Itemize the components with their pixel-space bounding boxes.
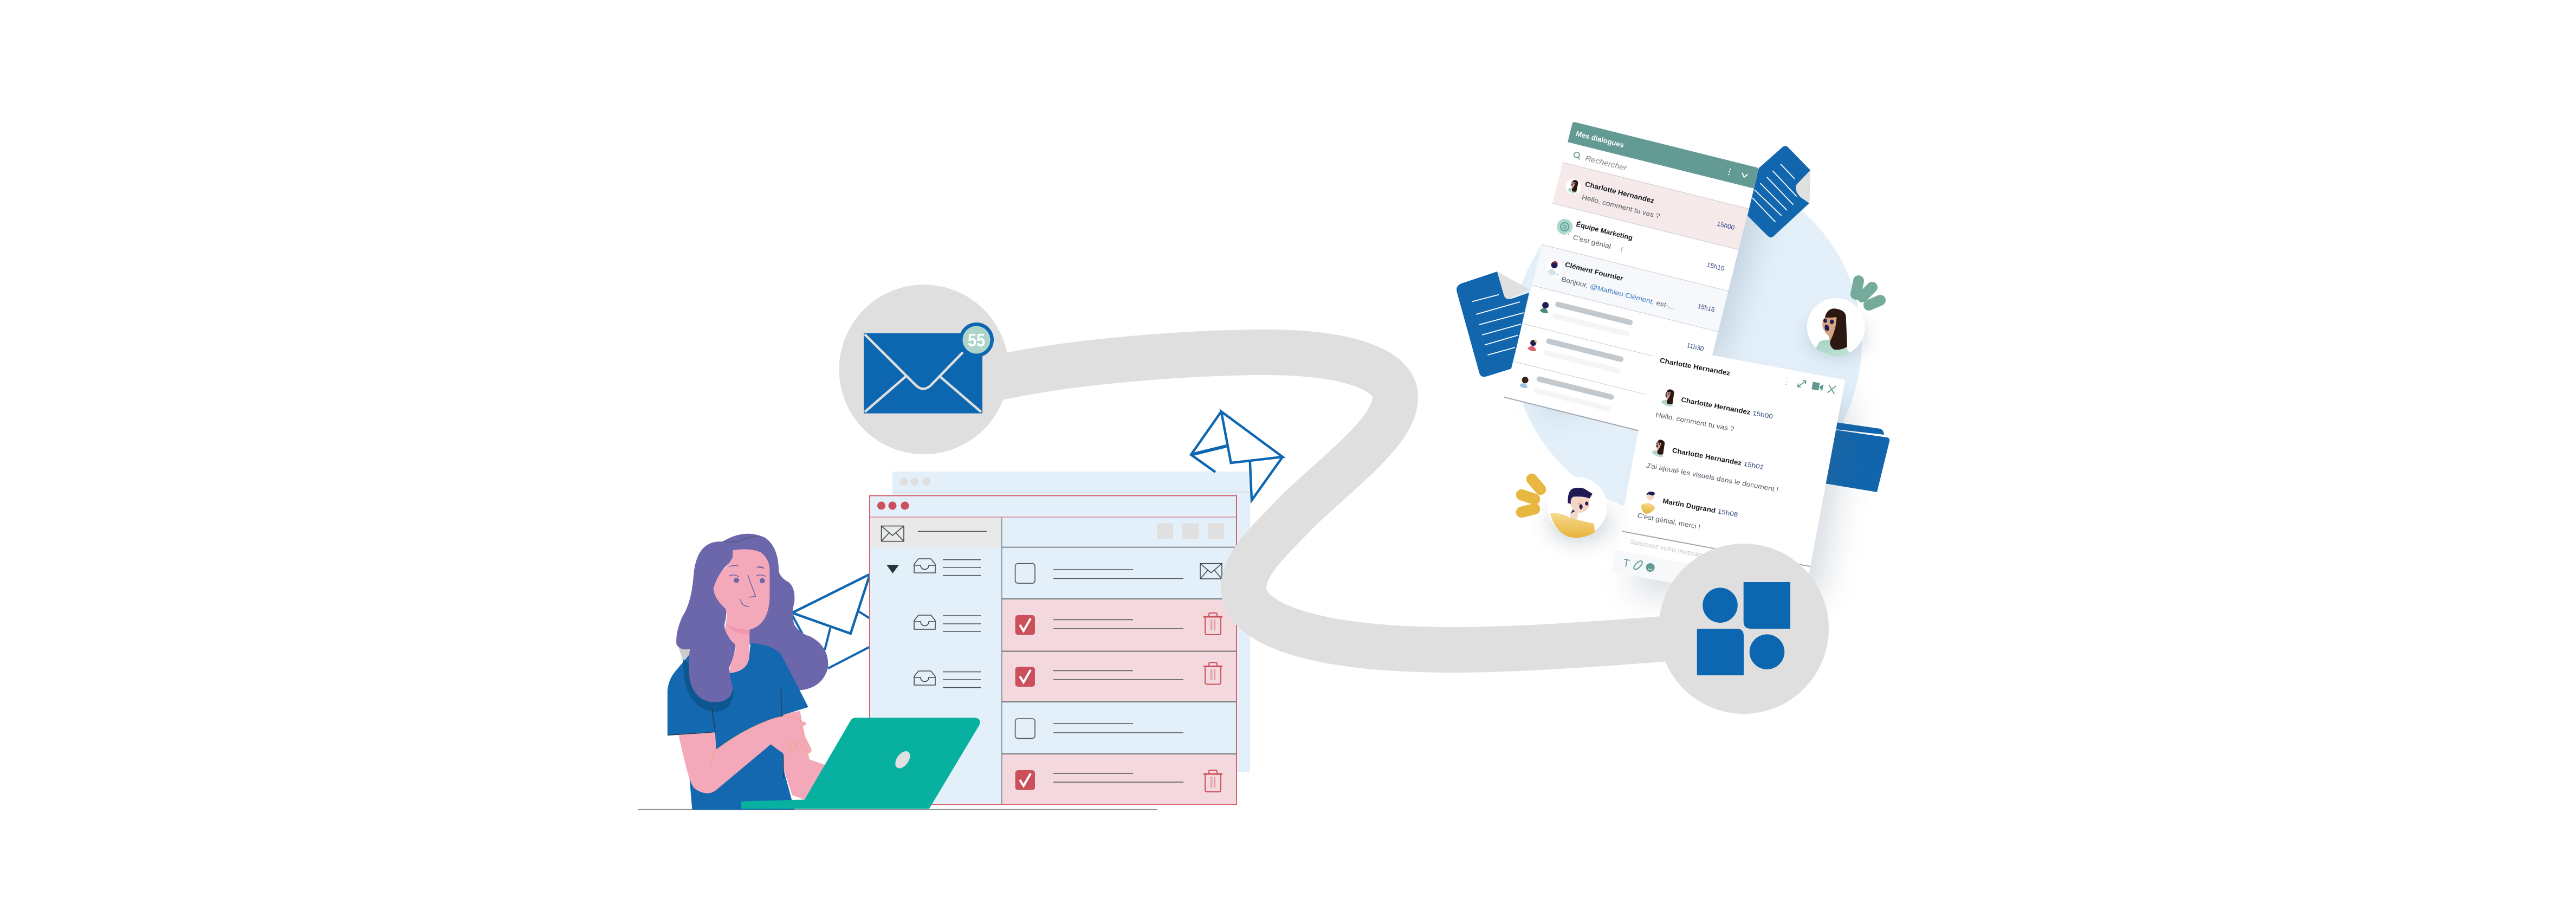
window title dots [877, 502, 909, 509]
mail badge circle [839, 285, 1009, 454]
row: Clément Fournier [1532, 244, 1728, 332]
laptop [741, 718, 980, 809]
composer toolbar: T [1622, 557, 1630, 570]
composer divider [1622, 531, 1810, 566]
woman facial features [728, 565, 766, 606]
icon: document left [1457, 272, 1530, 377]
icon: flying envelope top [1191, 411, 1283, 500]
avatar: woman with green leaves [1807, 281, 1880, 357]
sidebar folder 1 [914, 559, 981, 576]
conversation window [1612, 344, 1845, 608]
row divider lines [1002, 547, 1236, 754]
composer toolbar [1612, 550, 1807, 608]
list header: Mes dialogues [1575, 130, 1625, 149]
icon: sidebar envelope [881, 526, 904, 541]
woman neck and far arm [725, 624, 826, 800]
message 1 [1655, 388, 1775, 440]
woman with laptop [668, 534, 980, 810]
search field: Rechercher [1584, 153, 1628, 172]
woman back hair [679, 534, 828, 690]
connecting grey path [970, 352, 1707, 650]
sidebar folder 3 [914, 671, 981, 688]
list bottom edge [1504, 397, 1690, 443]
row: Équipe Marketing: ! [1620, 246, 1623, 253]
row: Équipe Marketing: Équipe Marketing [1575, 220, 1634, 242]
list header [1568, 121, 1759, 189]
message 2 [1646, 438, 1783, 494]
panel body [1504, 121, 1759, 443]
dialogue list panel [1504, 121, 1759, 443]
icon: apps shapes [1697, 582, 1790, 675]
green leaves [1856, 281, 1880, 305]
window body [1612, 344, 1845, 608]
row placeholder 4 [1539, 298, 1706, 356]
red selected rows [1002, 599, 1236, 804]
avatar: man with yellow leaves [1522, 477, 1611, 543]
icon: document right [1747, 146, 1810, 237]
row: Équipe Marketing: C'est génial [1572, 234, 1612, 250]
sidebar folder 2 [914, 615, 981, 631]
conversation title: Charlotte Hernandez [1659, 357, 1731, 377]
email side illustration [638, 411, 1283, 810]
woman front hair [676, 538, 752, 702]
mail row 4 [1015, 719, 1183, 738]
front inbox window [870, 495, 1237, 804]
mail row 5 checked [1015, 770, 1222, 792]
icon: folder triangle [886, 565, 899, 573]
message 1: Hello, comment tu vas ? [1655, 411, 1735, 433]
row placeholder 6 [1518, 372, 1615, 412]
mail row 3 checked [1015, 662, 1222, 687]
row: Équipe Marketing [1554, 215, 1727, 279]
message input placeholder: Saisissez votre message [1629, 538, 1706, 559]
icon: closed envelope [864, 333, 982, 414]
row: Charlotte Hernandez: Charlotte Hernandez [1584, 180, 1655, 205]
woman pointing arm [679, 716, 811, 793]
message 1: Charlotte Hernandez [1680, 396, 1751, 416]
message 3 [1637, 490, 1739, 537]
message 3: 15h08 [1717, 507, 1739, 519]
mail row 2 checked [1015, 613, 1222, 635]
shirt shade [683, 660, 733, 712]
message 3: Martin Dugrand [1662, 497, 1716, 514]
back application window [892, 472, 1250, 772]
blue background circle [1512, 167, 1862, 518]
row: Clément Fournier: Clément Fournier [1564, 261, 1624, 282]
sidebar header [870, 518, 1002, 547]
ground line [638, 809, 1157, 810]
row: Charlotte Hernandez: 15h00 [1716, 220, 1736, 231]
icon: folder [1825, 422, 1889, 492]
unread count badge: 55 [968, 330, 985, 350]
yellow leaves [1522, 479, 1541, 512]
row placeholder 4: 11h30 [1686, 341, 1705, 353]
message 3: C'est génial, merci ! [1637, 512, 1701, 531]
unread count badge [959, 322, 994, 357]
apps circle [1659, 544, 1829, 714]
window actions [1786, 377, 1836, 394]
woman shirt [668, 643, 808, 810]
message 2: J'ai ajouté les visuels dans le document ! [1646, 462, 1779, 494]
row placeholder 5 [1527, 334, 1624, 374]
toolbar squares [1157, 524, 1224, 539]
chat side illustration [1457, 121, 1889, 608]
icon: flying envelope behind woman [792, 575, 869, 668]
message 2: Charlotte Hernandez [1672, 447, 1742, 467]
message 2: 15h01 [1743, 460, 1765, 471]
woman face [713, 549, 769, 630]
neck shadow [725, 624, 749, 635]
mail row 1 [1015, 564, 1222, 583]
row: Clément Fournier: 15h16 [1697, 302, 1716, 314]
row: Charlotte Hernandez: Hello, comment tu vas ? [1581, 193, 1661, 220]
row: Équipe Marketing: 15h10 [1706, 261, 1725, 273]
shirt fold lines [668, 687, 784, 778]
row dividers [1513, 162, 1749, 408]
search field [1573, 151, 1628, 172]
row: Charlotte Hernandez [1552, 162, 1749, 250]
row: Clément Fournier: Bonjour, @Mathieu Clément , est-... [1561, 275, 1675, 311]
shadows of chat windows [1539, 179, 1853, 599]
message 1: 15h00 [1752, 409, 1774, 421]
